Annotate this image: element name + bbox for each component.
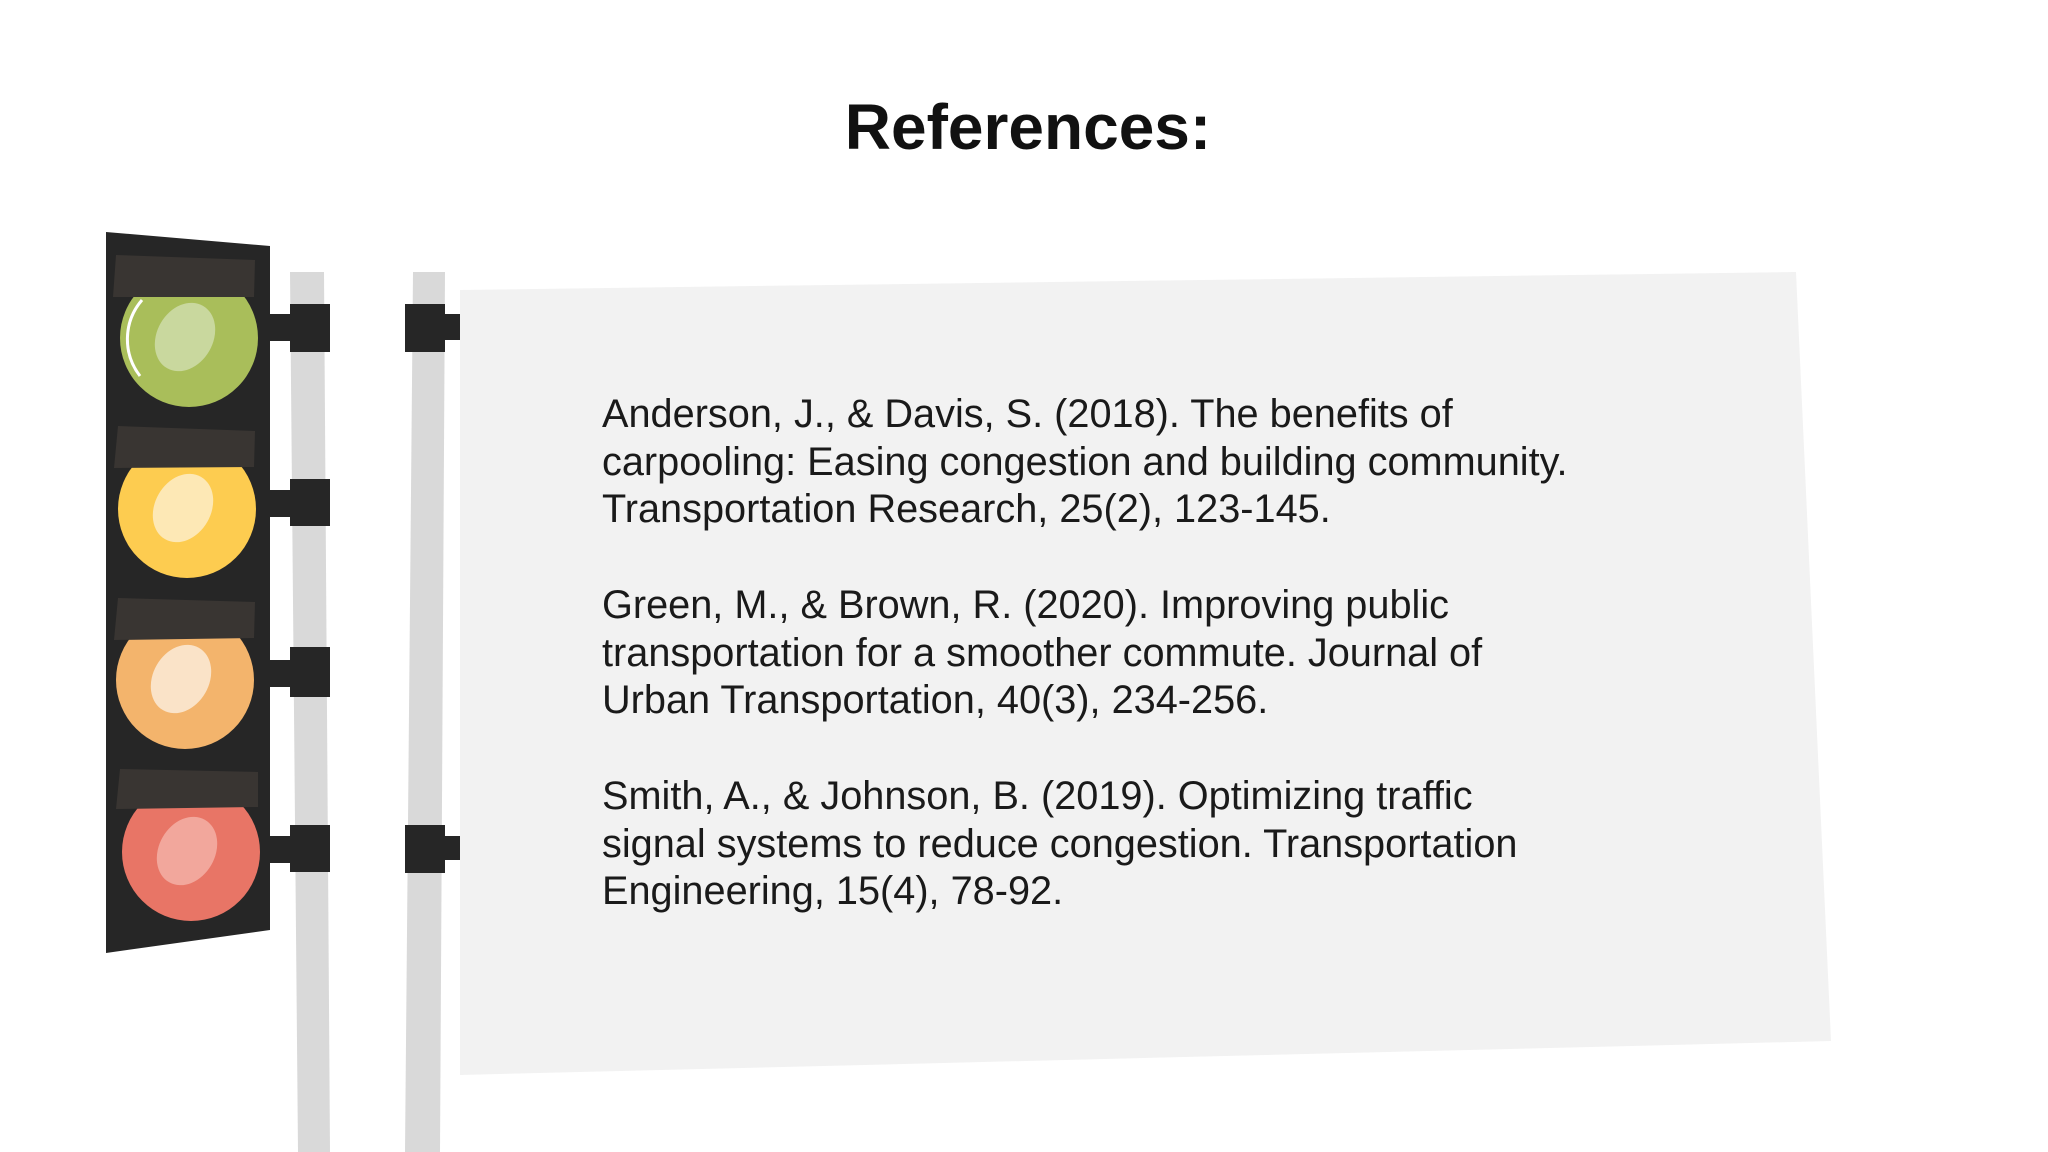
pole: left [290, 272, 330, 1152]
panel: references background [460, 272, 1831, 1075]
reference 2 [602, 583, 1482, 722]
traffic light body [106, 232, 270, 953]
connectors: traffic light to pole [265, 304, 330, 872]
reference 1: Transportation Research, 25(2), 123-145. [602, 487, 1331, 531]
light: orange [114, 598, 255, 749]
light: green [113, 255, 258, 407]
reference 1: carpooling: Easing congestion and building community. [602, 440, 1568, 484]
reference 3 [602, 774, 1518, 913]
pole: right [405, 272, 445, 1152]
reference 1: Anderson, J., & Davis, S. (2018). The benefits of [602, 392, 1453, 436]
reference 2: transportation for a smoother commute. Journal of [602, 631, 1482, 675]
reference 2: Green, M., & Brown, R. (2020). Improving public [602, 583, 1449, 627]
reference 3: signal systems to reduce congestion. Transportation [602, 822, 1518, 866]
reference 1 [602, 392, 1568, 531]
connectors: pole right [405, 304, 460, 873]
light: yellow [114, 426, 256, 578]
reference 2: Urban Transportation, 40(3), 234-256. [602, 678, 1268, 722]
reference 3: Engineering, 15(4), 78-92. [602, 869, 1063, 913]
title: References: [845, 91, 1211, 163]
light: red [116, 769, 260, 921]
reference 3: Smith, A., & Johnson, B. (2019). Optimizing traffic [602, 774, 1473, 818]
